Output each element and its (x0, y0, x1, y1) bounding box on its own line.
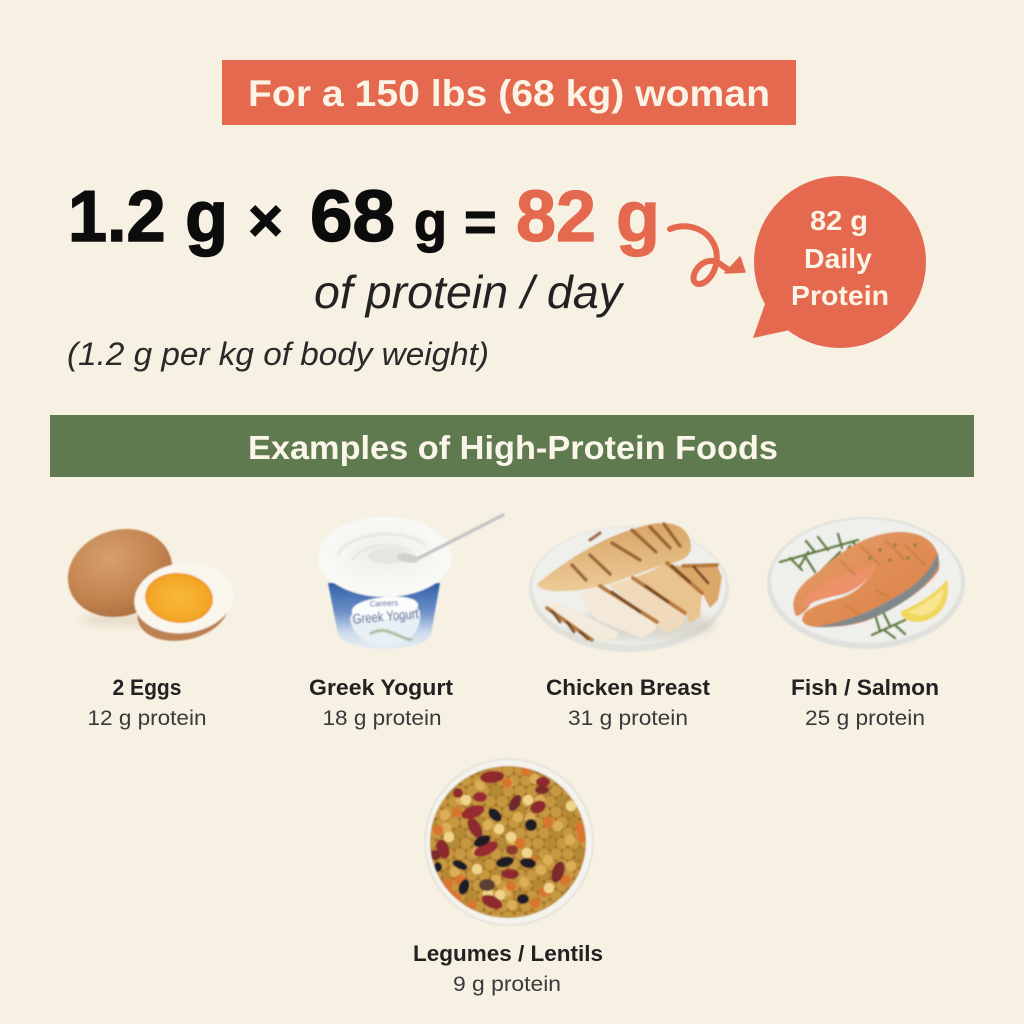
label: 2 eggs: 2 Eggs (112, 675, 182, 700)
callout: daily protein bubble: 82 g (810, 205, 868, 236)
formula: = (464, 190, 497, 253)
formula: g (414, 190, 447, 253)
label: 2 eggs: 12 g protein (88, 707, 206, 730)
chicken slices (547, 563, 722, 640)
food: legumes lentils (413, 759, 603, 996)
section heading: examples of high-protein foods: Examples of High-Protein Foods (248, 429, 778, 466)
food: eggs (56, 516, 238, 730)
icon: chicken plate (529, 523, 729, 652)
callout: daily protein bubble: Daily (804, 243, 872, 274)
label: fish salmon: 25 g protein (805, 707, 925, 730)
food: greek yogurt (309, 515, 503, 730)
callout: daily protein bubble (753, 176, 926, 348)
icon: bowl of legumes (424, 759, 593, 925)
label: fish salmon (791, 675, 939, 730)
icon: yogurt cup (318, 515, 503, 649)
label: chicken breast: 31 g protein (568, 707, 688, 730)
formula: × (248, 187, 283, 254)
arrow: curly arrow to bubble (670, 226, 745, 284)
section heading: examples of high-protein foods (50, 415, 974, 477)
formula caption: of protein per day: of protein / day (314, 266, 625, 318)
label: fish salmon: Fish / Salmon (791, 675, 939, 700)
icon: salmon plate (767, 517, 965, 649)
label: chicken breast: Chicken Breast (546, 675, 711, 700)
formula: 1.2 g (68, 177, 228, 257)
label: 2 eggs (88, 675, 206, 730)
formula: 68 (310, 177, 395, 257)
icon: yogurt cup: Greek Yogurt (352, 605, 419, 627)
label: greek yogurt: Greek Yogurt (309, 675, 454, 700)
food: chicken breast (529, 523, 729, 730)
label: legumes lentils: 9 g protein (453, 973, 561, 996)
icon: yogurt cup: Careers (370, 599, 398, 608)
icon: eggs (56, 516, 238, 649)
title banner (222, 60, 796, 125)
lentil rows (424, 770, 592, 917)
title banner: For a 150 lbs (68 kg) woman (248, 73, 770, 114)
label: legumes lentils: Legumes / Lentils (413, 941, 603, 966)
food: fish salmon (767, 517, 965, 730)
note: grams per kg: (1.2 g per kg of body weight) (67, 336, 489, 372)
label: legumes lentils (413, 941, 603, 996)
formula: 82 g (516, 177, 660, 257)
label: greek yogurt: 18 g protein (322, 707, 442, 730)
label: greek yogurt (309, 675, 454, 730)
formula (68, 177, 660, 257)
label: chicken breast (546, 675, 711, 730)
callout: daily protein bubble: Protein (791, 280, 889, 311)
